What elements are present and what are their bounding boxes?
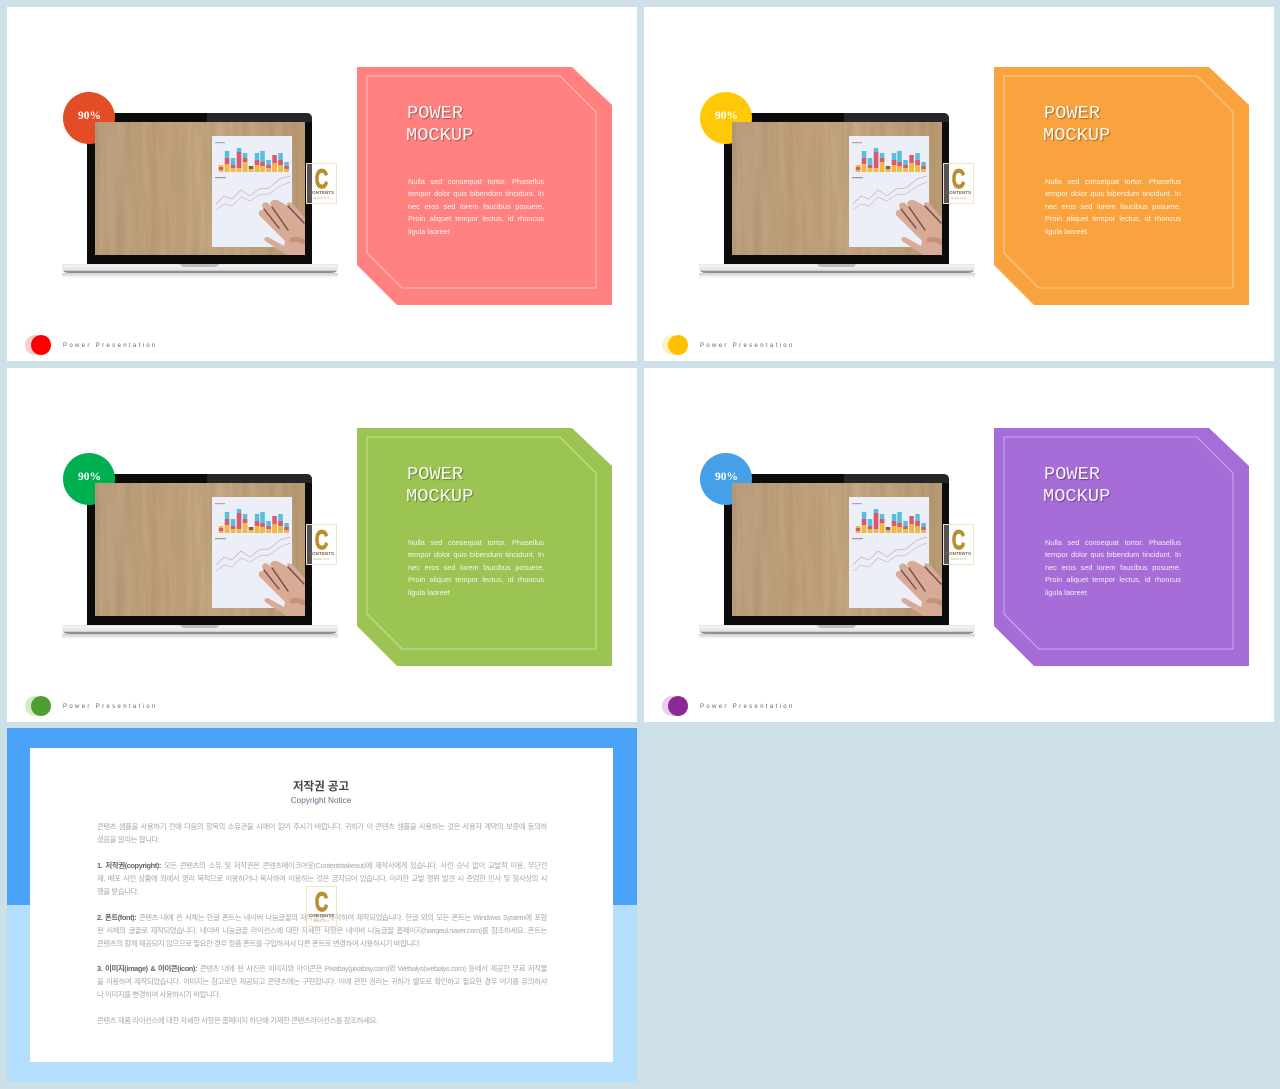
- body text: ligula laoreet: [1045, 588, 1087, 597]
- heading: [1043, 102, 1111, 146]
- body text: [1045, 177, 1181, 236]
- notice body text: 1. 저작권(copyright): 모든 콘텐츠의 소유 및 저작권은 콘텐츠메이크아웃(Contentstakeout)에 제작사에게 있습니다. 사전 승낙 없이 교발적 이용, 무단전: [97, 861, 547, 870]
- notice body text: 콘텐츠의 함께 제공되지 않으므로 필요한 경우 정품 폰트를 구입하셔서 다른 폰트로 변경하여 사용하시기 바랍니다.: [97, 939, 421, 948]
- laptop mockup with 90% badge: [699, 92, 975, 277]
- body text: tempor dolor quis bibendum tincidunt. In: [408, 550, 544, 559]
- watermark logo: [306, 163, 337, 204]
- notice body text: 2. 폰트(font): 콘텐츠 내에 쓴 서체는 한글 폰트는 네이버 나눔글꼴의 저작물로 제작하여 제작되었습니다. 한글 외의 모든 폰트는 Windows System에 포함: [97, 913, 547, 922]
- body text: [408, 538, 544, 597]
- laptop mockup with 90% badge: [699, 453, 975, 638]
- panel: orange power mockup slide: [644, 7, 1274, 361]
- badge: 90%: [700, 92, 752, 144]
- body text: nec eros sed lorem faucibus posuere.: [1045, 202, 1181, 211]
- body text: Nulla sed consequat tortor. Phasellus: [1045, 538, 1181, 547]
- notice subtitle: Copyright Notice: [291, 796, 351, 805]
- watermark logo: MAKE OUT: [314, 196, 329, 200]
- badge: 90%: 90%: [715, 471, 738, 483]
- notice body text: 셨음을 알리는 합니다.: [97, 835, 160, 844]
- watermark logo: C: [315, 887, 328, 917]
- watermark logo: CONTENTS: [946, 551, 971, 556]
- watermark logo: MAKE OUT: [314, 919, 329, 923]
- body text: [408, 177, 544, 236]
- card background with inner outline: [994, 67, 1249, 305]
- heading: POWER: [1044, 102, 1100, 124]
- panel: green power mockup slide: [7, 368, 637, 722]
- watermark logo: [943, 524, 974, 565]
- body text: Proin aliquet tempor lectus, id rhoncus: [1045, 575, 1181, 584]
- notice heading: 저작권 공고: [293, 781, 349, 793]
- body text: [1045, 538, 1181, 597]
- heading: MOCKUP: [1043, 485, 1110, 507]
- watermark logo: C: [952, 164, 965, 194]
- notice body text: 3. 이미지(image) & 아이콘(icon): 콘텐츠 내에 된 사진은 이미지와 아이콘은 Pixabay(pixabay.com)와 Webalys(webalys.com) 등에서 제공한 무료 저작물: [97, 964, 547, 973]
- watermark logo: MAKE OUT: [951, 196, 966, 200]
- badge: 90%: 90%: [78, 471, 101, 483]
- body text: Nulla sed consequat tortor. Phasellus: [408, 177, 544, 186]
- footer marker dots: [25, 335, 51, 355]
- watermark logo: [306, 886, 337, 927]
- badge: 90%: [63, 92, 115, 144]
- watermark logo: CONTENTS: [309, 913, 334, 918]
- body text: tempor dolor quis bibendum tincidunt. In: [1045, 550, 1181, 559]
- watermark logo: [943, 163, 974, 204]
- body text: Proin aliquet tempor lectus, id rhoncus: [1045, 214, 1181, 223]
- watermark logo: CONTENTS: [309, 190, 334, 195]
- watermark logo: CONTENTS: [309, 551, 334, 556]
- body text: nec eros sed lorem faucibus posuere.: [1045, 563, 1181, 572]
- heading: [406, 102, 474, 146]
- heading: POWER: [407, 463, 463, 485]
- body text: tempor dolor quis bibendum tincidunt. In: [408, 189, 544, 198]
- heading: MOCKUP: [406, 485, 473, 507]
- panel: purple power mockup slide: [644, 368, 1274, 722]
- footer marker dots: [662, 696, 688, 716]
- watermark logo: C: [315, 525, 328, 555]
- watermark logo: C: [315, 164, 328, 194]
- card background with inner outline: [357, 67, 612, 305]
- badge: 90%: [700, 453, 752, 505]
- body text: nec eros sed lorem faucibus posuere.: [408, 563, 544, 572]
- heading: MOCKUP: [406, 124, 473, 146]
- body text: ligula laoreet: [1045, 227, 1087, 236]
- watermark logo: MAKE OUT: [951, 557, 966, 561]
- panel: coral power mockup slide: [7, 7, 637, 361]
- notice body text: 콘텐츠 샘플을 사용하기 전에 다음의 항목의 소유권을 시에이 읽어 주시기 바랍니다. 귀하가 이 콘텐츠 샘플을 사용하는 것은 사용자 계약의 보증에 동의하: [97, 822, 547, 831]
- body text: ligula laoreet: [408, 227, 450, 236]
- footer marker dots: [662, 335, 688, 355]
- notice body text: 재, 배포 사전 상황에 외에서 영리 목적으로 이용하거나 복사하여 이용하는 것은 금지되어 있습니다. 이러한 교발 행위 발견 시 준엄한 민사 및 형사상의 시: [97, 874, 547, 883]
- laptop mockup with 90% badge: [62, 92, 338, 277]
- notice body text: 된 서체의 글꼴로 제작되었습니다. 네이버 나눔글꼴 라이선스에 대한 자세한 사항은 네이버 나눔글꼴 홈페이지(hangeul.naver.com)를 참조하세요. 폰트는: [97, 926, 547, 935]
- panel: copyright notice: [7, 728, 637, 1082]
- notice body text: 행을 받습니다.: [97, 887, 139, 896]
- body text: Nulla sed consequat tortor. Phasellus: [408, 538, 544, 547]
- badge: 90%: 90%: [78, 110, 101, 122]
- heading: POWER: [1044, 463, 1100, 485]
- laptop mockup with 90% badge: [62, 453, 338, 638]
- heading: MOCKUP: [1043, 124, 1110, 146]
- watermark logo: C: [952, 525, 965, 555]
- body text: nec eros sed lorem faucibus posuere.: [408, 202, 544, 211]
- notice body text: 나 이미지를 변경하여 사용하시기 바랍니다.: [97, 990, 220, 999]
- notice body text: [97, 822, 548, 1025]
- watermark logo: CONTENTS: [946, 190, 971, 195]
- badge: 90%: 90%: [715, 110, 738, 122]
- body text: Proin aliquet tempor lectus, id rhoncus: [408, 575, 544, 584]
- white notice sheet: [30, 748, 613, 1062]
- card background with inner outline: [994, 428, 1249, 666]
- body text: Nulla sed consequat tortor. Phasellus: [1045, 177, 1181, 186]
- footer label: Power Presentation: [63, 704, 158, 710]
- heading: [1043, 463, 1111, 507]
- notice body text: 콘텐츠 제품 라이선스에 대한 자세한 사항은 홈페이지 하단에 기재한 콘텐츠라이선스를 참조하세요.: [97, 1016, 378, 1025]
- footer label: Power Presentation: [63, 343, 158, 349]
- body text: Proin aliquet tempor lectus, id rhoncus: [408, 214, 544, 223]
- footer marker dots: [25, 696, 51, 716]
- heading: POWER: [407, 102, 463, 124]
- watermark logo: [306, 524, 337, 565]
- body text: tempor dolor quis bibendum tincidunt. In: [1045, 189, 1181, 198]
- footer label: Power Presentation: [700, 343, 795, 349]
- card background with inner outline: [357, 428, 612, 666]
- footer label: Power Presentation: [700, 704, 795, 710]
- watermark logo: MAKE OUT: [314, 557, 329, 561]
- body text: ligula laoreet: [408, 588, 450, 597]
- heading: [406, 463, 474, 507]
- notice body text: 을 이용하여 제작되었습니다. 이미지는 참고로만 제공되고 콘텐츠에는 구현합니다. 이에 관한 권리는 귀하가 별도로 확인하고 필요한 경우 여기를 유의하셔: [97, 977, 547, 986]
- badge: 90%: [63, 453, 115, 505]
